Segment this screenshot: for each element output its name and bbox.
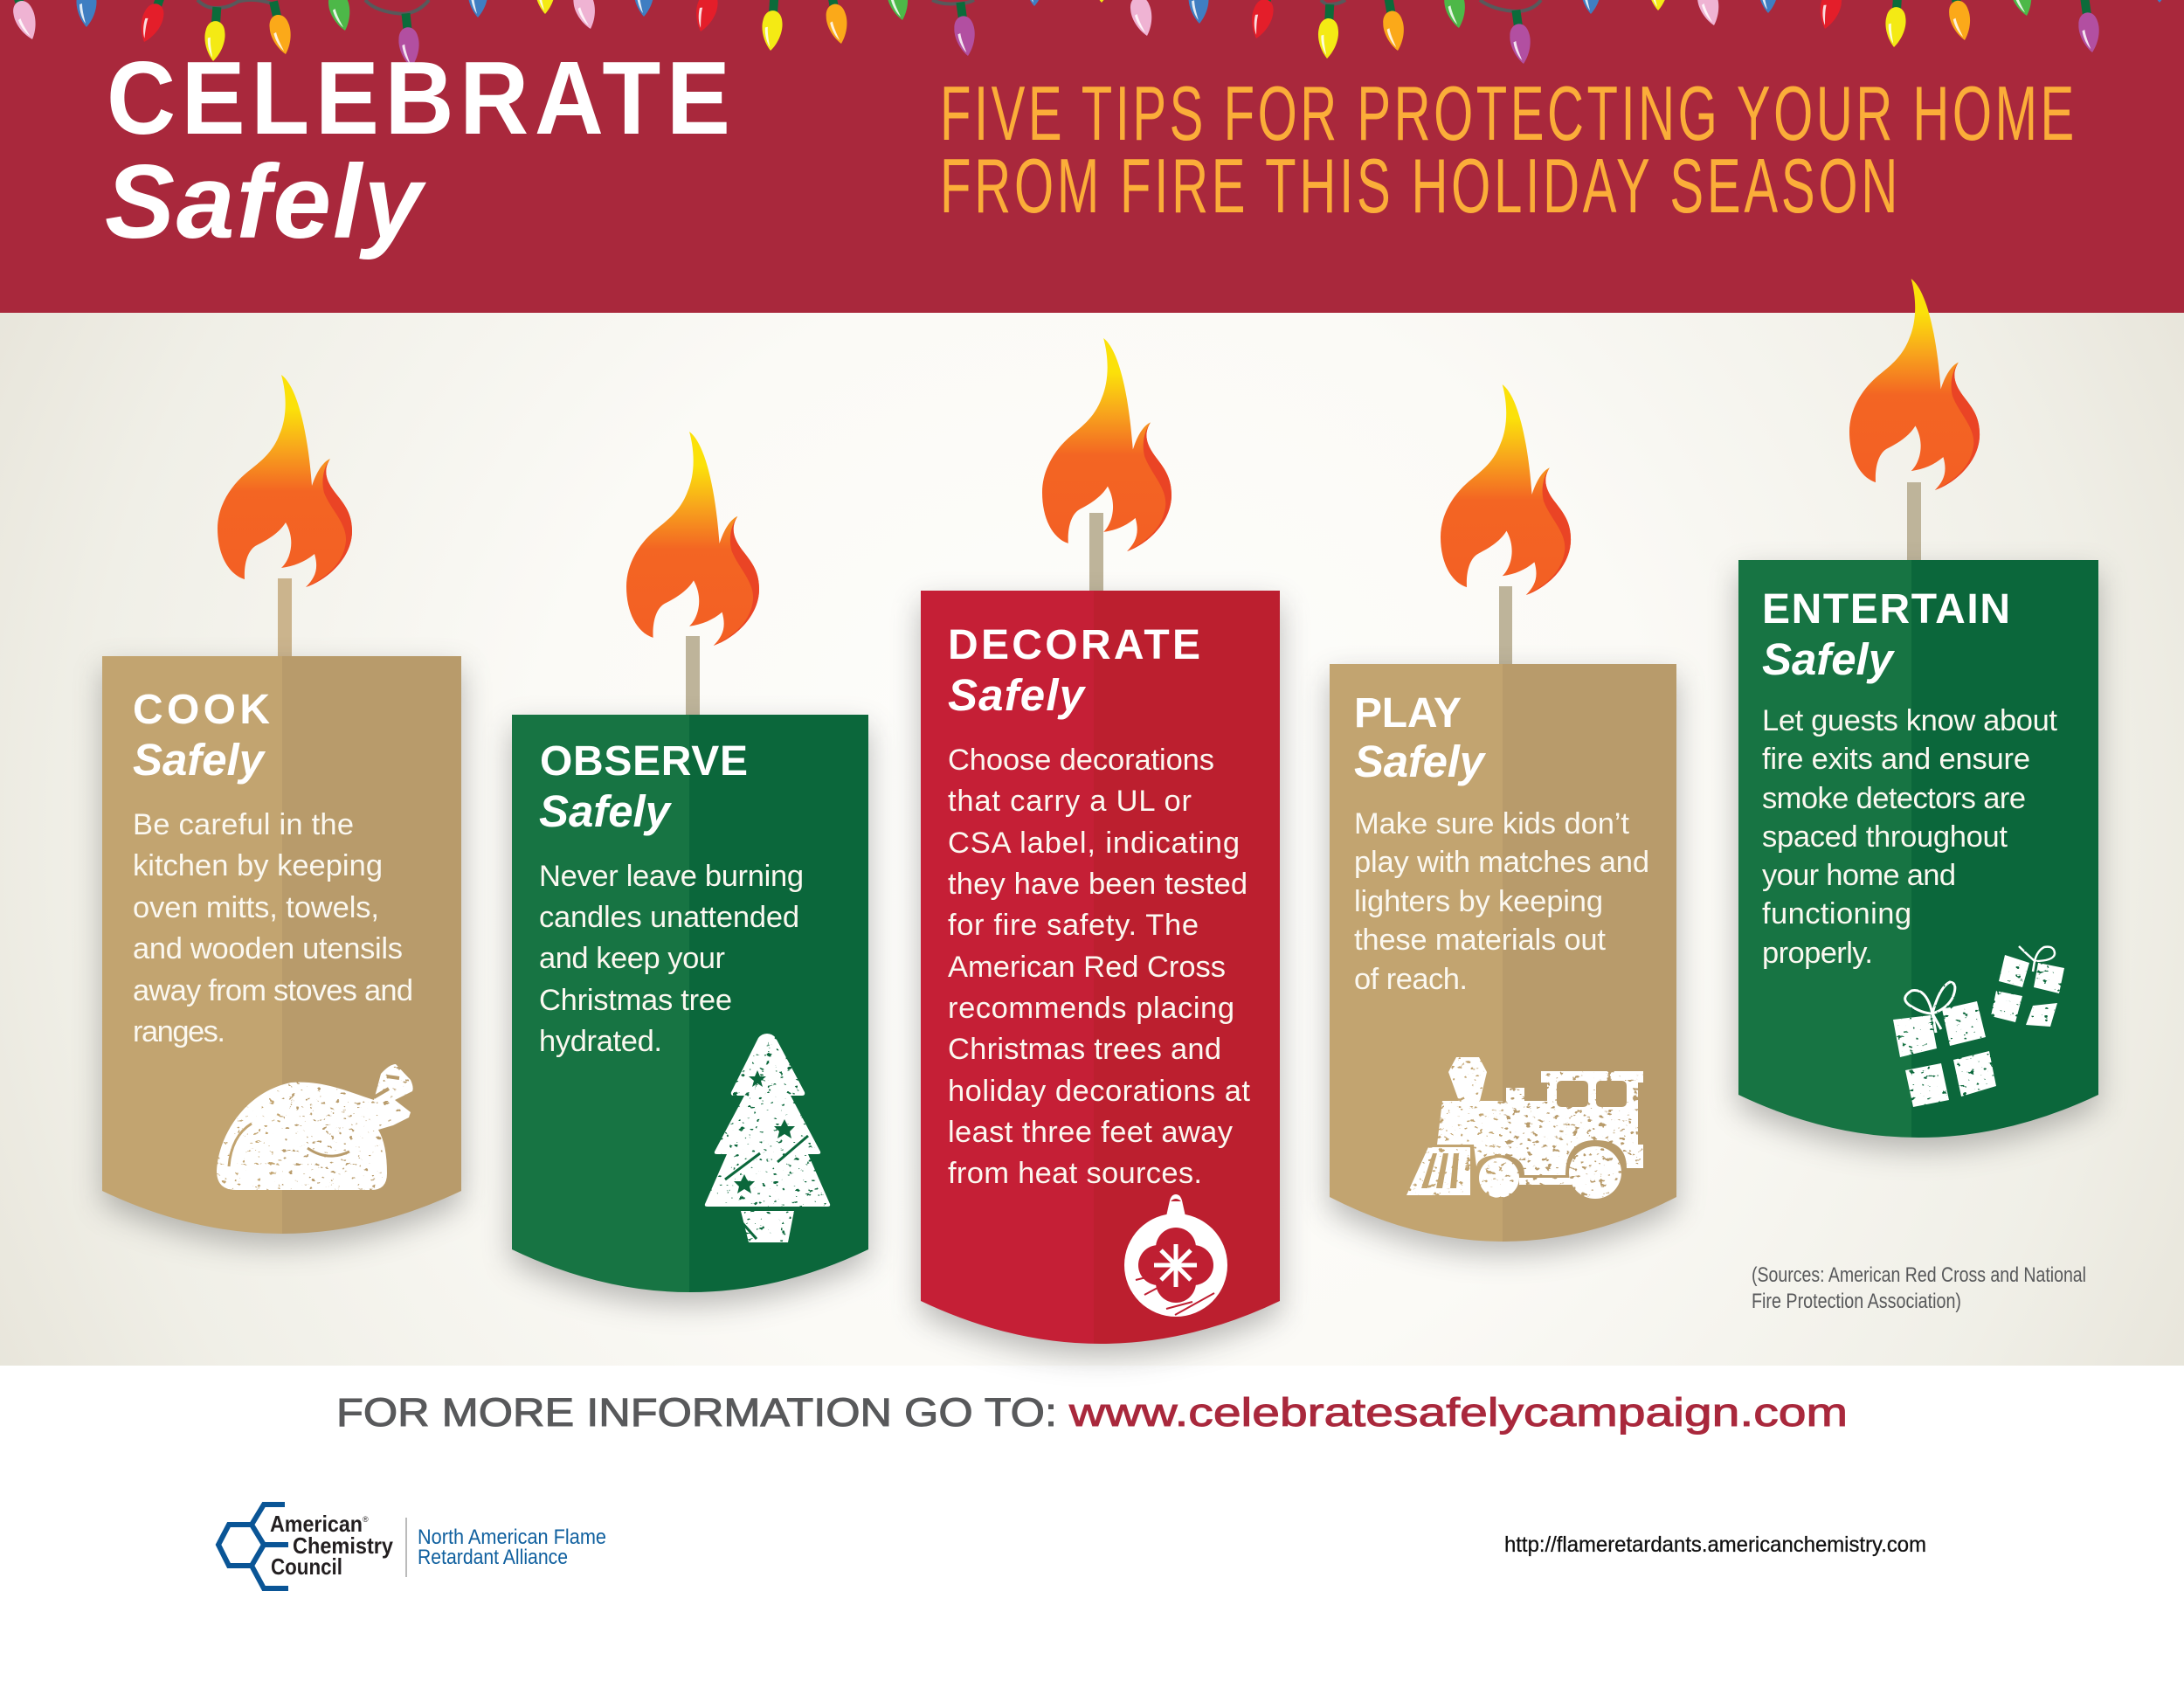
cook candle body — [102, 656, 461, 1268]
entertain body text: your home and — [1762, 859, 1956, 892]
cook body text: ranges. — [133, 1015, 225, 1048]
play body text: of reach. — [1354, 963, 1468, 996]
sources note: (Sources: American Red Cross and National — [1752, 1263, 2086, 1287]
panel: decorate candle — [921, 338, 1280, 1377]
observe body text: Never leave burning — [539, 860, 804, 893]
decorate heading — [948, 622, 1200, 720]
entertain body text: spaced throughout — [1762, 820, 2008, 854]
decorate body text: American Red Cross — [948, 951, 1226, 984]
panel: play candle — [1330, 384, 1676, 1293]
background panel — [0, 313, 2184, 1366]
observe body text — [539, 860, 804, 1058]
decorate body text — [948, 744, 1250, 1190]
panel: cook candle — [102, 375, 461, 1268]
observe body text: and keep your — [539, 942, 725, 975]
decorate body text: Choose decorations — [948, 744, 1214, 777]
decorate candle body — [921, 591, 1280, 1377]
decorate body text: CSA label, indicating — [948, 827, 1240, 860]
play body text: Make sure kids don’t — [1354, 807, 1629, 841]
alliance name — [418, 1525, 606, 1569]
panel: entertain candle — [1738, 279, 2098, 1172]
title: Safely — [105, 143, 426, 260]
cook heading — [133, 687, 270, 785]
observe body text: hydrated. — [539, 1025, 662, 1058]
alliance name: Retardant Alliance — [418, 1546, 568, 1569]
logo wordmark — [270, 1511, 393, 1580]
decorate heading: DECORATE — [948, 622, 1200, 668]
decorate body text: they have been tested — [948, 868, 1248, 901]
icon: toy train — [1406, 1057, 1643, 1199]
call to action: FOR MORE INFORMATION GO TO: — [336, 1390, 1057, 1435]
play candle body — [1330, 664, 1676, 1293]
call to action: www.celebratesafelycampaign.com — [1068, 1390, 1848, 1435]
entertain heading — [1762, 586, 2010, 684]
icon: ornament — [1124, 1194, 1227, 1317]
play heading: PLAY — [1354, 690, 1462, 737]
decorate body text: Christmas trees and — [948, 1033, 1221, 1066]
sources note: Fire Protection Association) — [1752, 1290, 1961, 1313]
logo wordmark: Council — [271, 1553, 342, 1580]
cook candle shadow — [102, 668, 461, 1246]
icon: decorate flame — [1042, 338, 1171, 551]
play body text: lighters by keeping — [1354, 885, 1603, 918]
entertain body text: functioning — [1762, 897, 1911, 930]
subtitle — [940, 71, 2074, 229]
decorate body text: holiday decorations at — [948, 1075, 1250, 1108]
icon: hexagon mark — [218, 1505, 288, 1588]
logo wordmark: Chemistry — [293, 1532, 393, 1559]
cook body text: and wooden utensils — [133, 932, 403, 965]
icon: cook flame — [218, 375, 352, 587]
header band — [0, 0, 2184, 313]
panel: observe candle — [512, 432, 868, 1326]
entertain body text: properly. — [1762, 937, 1873, 970]
logo wordmark: American — [270, 1511, 363, 1537]
cook heading: COOK — [133, 687, 270, 733]
observe heading: OBSERVE — [540, 738, 748, 785]
observe heading — [539, 738, 748, 836]
logo divider — [405, 1518, 407, 1577]
play heading: Safely — [1354, 737, 1487, 786]
play heading — [1354, 690, 1487, 786]
observe candle body — [512, 715, 868, 1326]
logo: american chemistry council — [218, 1505, 606, 1588]
entertain heading: Safely — [1762, 634, 1896, 684]
title: CELEBRATE — [107, 41, 730, 156]
play body text: play with matches and — [1354, 846, 1649, 879]
cook body text: away from stoves and — [133, 974, 413, 1007]
cook heading: Safely — [133, 735, 266, 785]
decorate body text: least three feet away — [948, 1116, 1234, 1149]
decorate body text: recommends placing — [948, 992, 1234, 1025]
string of holiday lights — [5, 0, 2170, 68]
entertain candle shadow — [1738, 572, 2098, 1150]
decorate heading: Safely — [948, 670, 1087, 720]
observe wick — [686, 636, 700, 716]
decorate wick — [1089, 513, 1103, 591]
icon: play flame — [1441, 384, 1571, 595]
icon: turkey — [217, 1064, 413, 1190]
cook body text: Be careful in the — [133, 808, 354, 841]
subtitle: FROM FIRE THIS HOLIDAY SEASON — [940, 143, 1897, 229]
play body text — [1354, 807, 1649, 996]
decorate body text: that carry a UL or — [948, 785, 1192, 818]
cook body text — [133, 808, 413, 1048]
decorate body text: from heat sources. — [948, 1157, 1202, 1190]
entertain candle body — [1738, 560, 2098, 1172]
entertain body text: fire exits and ensure — [1762, 743, 2030, 776]
decorate candle shadow — [921, 603, 1280, 1356]
sources note — [1752, 1263, 2086, 1313]
observe body text: candles unattended — [539, 901, 799, 934]
alliance name: North American Flame — [418, 1525, 606, 1549]
play body text: these materials out — [1354, 924, 1606, 957]
subtitle: FIVE TIPS FOR PROTECTING YOUR HOME — [940, 71, 2074, 156]
entertain body text — [1762, 704, 2057, 970]
observe heading: Safely — [539, 786, 673, 836]
entertain body text: Let guests know about — [1762, 704, 2057, 737]
cook body text: oven mitts, towels, — [133, 891, 379, 924]
entertain heading: ENTERTAIN — [1762, 586, 2010, 633]
icon: gifts — [1893, 946, 2064, 1107]
icon: christmas tree — [705, 1034, 830, 1242]
entertain wick — [1907, 482, 1921, 561]
icon: entertain flame — [1849, 279, 1980, 490]
play wick — [1499, 586, 1512, 665]
title — [105, 41, 730, 260]
decorate body text: for fire safety. The — [948, 909, 1199, 942]
cook wick — [278, 578, 292, 657]
logo wordmark: ® — [363, 1515, 369, 1524]
observe body text: Christmas tree — [539, 984, 732, 1017]
play candle shadow — [1330, 676, 1676, 1254]
website address: http://flameretardants.americanchemistry.com — [1504, 1532, 1926, 1557]
observe candle shadow — [512, 727, 868, 1304]
call to action — [336, 1390, 1848, 1435]
entertain body text: smoke detectors are — [1762, 782, 2026, 815]
cook body text: kitchen by keeping — [133, 849, 383, 882]
icon: observe flame — [626, 432, 759, 646]
